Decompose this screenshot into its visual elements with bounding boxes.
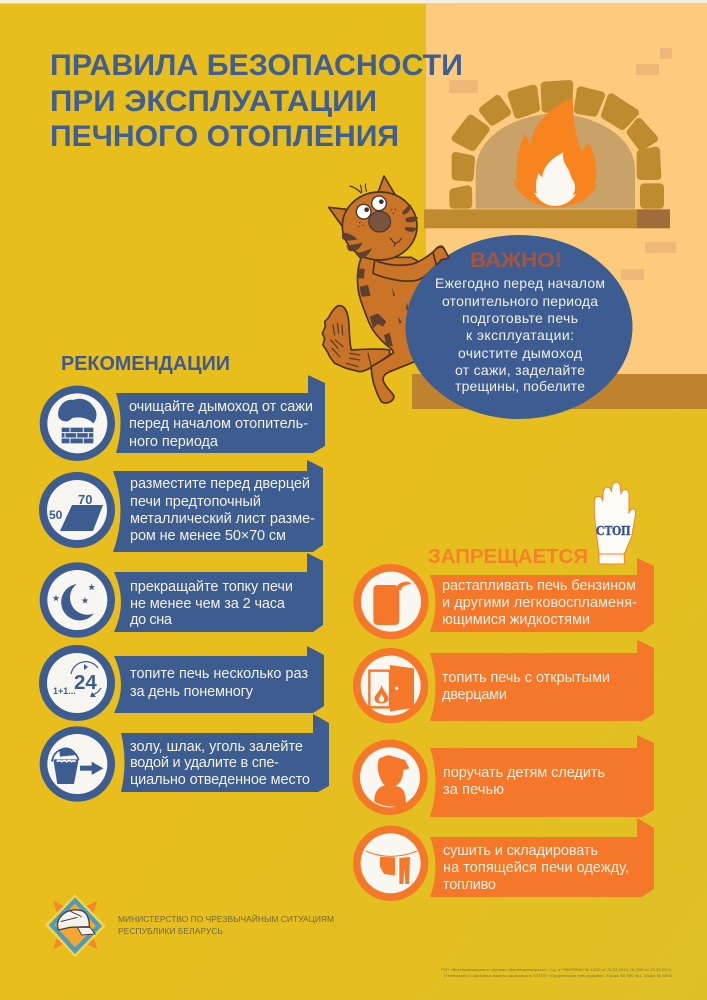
icon: stop hand: СТОП [596, 523, 631, 538]
callout: important [406, 235, 632, 419]
text: топливо [443, 877, 496, 893]
recommendation 2 [39, 460, 323, 552]
recommendation 3 [40, 553, 323, 638]
text: металлический лист разме- [130, 511, 315, 527]
callout text: к эксплуатации: [466, 327, 574, 343]
prohibition 1 [353, 558, 654, 639]
text: за день понемногу [130, 684, 254, 700]
ribbon [113, 460, 323, 552]
icon: bucket and arrow [40, 726, 115, 802]
print imprint: Отпечатано с оригинал-макета заказчика в ГОУПП «Гродненская типография». Тираж 55 000 экз. Заказ № 5995 [444, 973, 673, 978]
text: печи предтопочный [130, 494, 261, 510]
text: и другими легковоспламеня- [442, 595, 637, 611]
text: очищайте дымоход от сажи [129, 399, 313, 415]
text: на топящейся печи одежду, [443, 860, 629, 876]
text [443, 843, 629, 893]
cat body markings [357, 268, 409, 347]
title: ПРИ ЭКСПЛУАТАЦИИ [50, 85, 377, 118]
callout text: трещины, побелите [455, 378, 585, 394]
text [443, 765, 605, 798]
recommendation 1 [40, 375, 325, 461]
icon: metal sheet: 50 [49, 508, 63, 522]
logo: ministry emblem [45, 894, 106, 957]
ribbon [430, 640, 654, 721]
callout text [435, 275, 605, 394]
ribbon [116, 375, 325, 453]
icon: 24 hours: 24 [74, 671, 97, 694]
cat character [322, 176, 449, 403]
ribbon [430, 558, 654, 632]
text: перед началом отопитель- [129, 416, 308, 432]
icon: 24 hours: 1+1... [53, 686, 76, 696]
heading: recommendations: РЕКОМЕНДАЦИИ [61, 353, 230, 375]
prohibition 2 [353, 640, 654, 723]
icon: 24 hours [39, 645, 115, 721]
print imprint [441, 967, 673, 978]
text: топить печь с открытыми [442, 670, 610, 686]
icon: stop hand [594, 482, 636, 564]
ministry name: МИНИСТЕРСТВО ПО ЧРЕЗВЫЧАЙНЫМ СИТУАЦИЯМ [118, 913, 334, 924]
text: до сна [130, 612, 173, 628]
text: прекращайте топку печи [130, 579, 293, 595]
cat tail [322, 306, 390, 372]
text [130, 739, 310, 788]
text: не менее чем за 2 часа [130, 596, 286, 612]
print imprint: РУП «Витебскинжпроект» филиал «Витебскинжпроект». Сд. в ГРАФПРИМ № 1/233 от 24.03.2014, № 2/60 от 15.03.2014. [441, 967, 672, 972]
ribbon [114, 646, 324, 713]
text [130, 666, 308, 700]
text: разместите перед дверцей [130, 476, 310, 492]
panel: oven wall [412, 4, 707, 409]
ribbon [430, 818, 654, 897]
icon: open door with fire [353, 648, 428, 723]
icon: fuel canister [353, 564, 429, 639]
text [130, 476, 315, 544]
text: ного периода [129, 434, 219, 450]
callout heading: ВАЖНО! [470, 249, 562, 272]
prohibition 3 [352, 735, 654, 817]
heading: prohibited: ЗАПРЕЩАЕТСЯ [428, 545, 588, 568]
cat head [329, 176, 418, 260]
cat paw [433, 247, 449, 265]
ribbon [430, 735, 654, 817]
callout text: очистите дымоход [458, 345, 582, 361]
text: за печью [443, 782, 504, 798]
ministry name [118, 913, 334, 936]
callout text: подготовьте печь [462, 310, 578, 326]
text: водой и удалите в спе- [130, 755, 279, 771]
callout text: отопительного периода [442, 293, 598, 309]
text: растапливать печь бензином [442, 578, 636, 594]
text: топите печь несколько раз [130, 666, 308, 682]
text [129, 399, 313, 450]
text: поручать детям следить [443, 765, 605, 781]
ministry name: РЕСПУБЛИКИ БЕЛАРУСЬ [118, 926, 224, 936]
callout text: от сажи, заделайте [455, 362, 585, 378]
title: ПРАВИЛА БЕЗОПАСНОСТИ [50, 49, 463, 82]
title [50, 49, 463, 153]
ribbon [121, 714, 329, 792]
recommendation 5 [40, 714, 329, 802]
text: дверцами [442, 687, 507, 703]
recommendation 4 [39, 645, 324, 721]
icon: metal sheet: 70 [78, 492, 92, 507]
text [130, 579, 293, 628]
text [442, 578, 637, 628]
icon: moon and stars [40, 562, 115, 638]
oven with fire [424, 84, 670, 228]
icon: child [352, 740, 428, 815]
text: золу, шлак, уголь залейте [130, 739, 303, 755]
text [442, 670, 610, 703]
text: ром не менее 50×70 см [130, 528, 286, 544]
title: ПЕЧНОГО ОТОПЛЕНИЯ [50, 120, 399, 153]
text: циально отведенное место [130, 772, 310, 788]
cat arm [373, 246, 449, 281]
callout text: Ежегодно перед началом [435, 275, 605, 291]
text: ющимися жидкостями [442, 612, 590, 628]
cat body [357, 257, 433, 403]
icon: metal sheet [39, 472, 115, 548]
text: сушить и складировать [443, 843, 598, 859]
cat tail fur [331, 323, 371, 367]
ribbon [114, 553, 323, 632]
icon: drying clothes [353, 826, 428, 901]
icon: soot and bricks [40, 386, 115, 461]
prohibition 4 [353, 818, 654, 901]
